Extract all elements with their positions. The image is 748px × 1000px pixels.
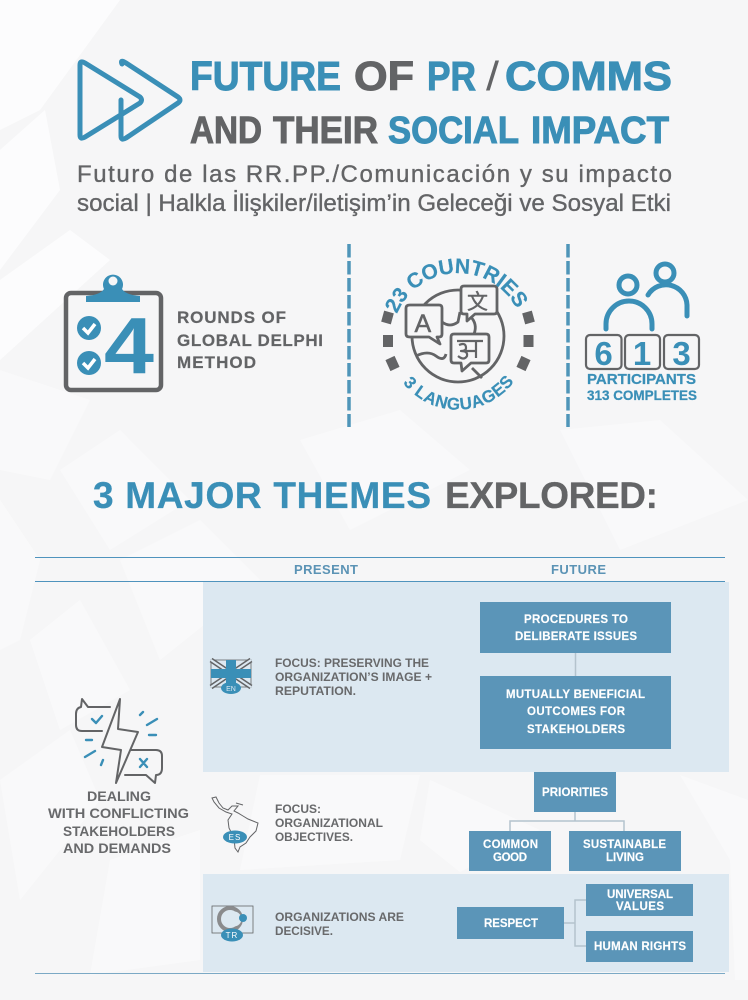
subtitle in Spanish and Turkish: Futuro de las RR.PP./Comunicación y su impacto [77,161,672,188]
icon: Turkey flag with TR badge: TR [226,931,238,940]
text: rounds of global Delphi method [177,308,323,372]
subtitle in Spanish and Turkish: social | Halkla İlişkiler/iletişim’in Geleceği ve Sosyal Etki [77,190,671,217]
box: human rights: HUMAN RIGHTS [594,941,686,953]
curved label: 23 countries: 23 COUNTRIES [386,258,528,314]
title: THEIR [273,110,378,152]
box: common good [469,831,551,871]
heading: 3 major themes explored: EXPLORED: [445,475,658,516]
icon: Turkey flag with TR badge [212,906,253,942]
text: Spanish present focus: FOCUS: [275,802,321,816]
text: Turkish present focus: DECISIVE. [275,924,333,938]
box: universal values [586,884,693,916]
icon: globe with translation bubbles [406,286,504,382]
box: procedures to deliberate issues [480,602,671,653]
panel: English row [203,582,729,772]
icon: clipboard with 4: 4 [104,301,155,390]
icon: Latin America map with ES badge: ES [229,833,241,842]
box: priorities: PRIORITIES [542,787,608,799]
subtitle in Spanish and Turkish [77,161,672,217]
text: dealing with conflicting stakeholders and demands: STAKEHOLDERS [63,823,175,839]
title: / [486,53,500,99]
box: common good: GOOD [493,852,527,864]
counter: 613 [586,335,699,372]
text: English present focus [275,656,432,698]
icon: clipboard with 4 [66,275,161,390]
text: Spanish present focus: OBJECTIVES. [275,830,353,844]
text: dealing with conflicting stakeholders and demands [48,788,189,856]
text: English present focus: REPUTATION. [275,684,356,698]
box: procedures to deliberate issues: PROCEDURES TO [524,614,628,626]
text: Turkish present focus [275,910,404,938]
text: dealing with conflicting stakeholders and demands: DEALING [87,788,151,804]
title: IMPACT [531,110,669,152]
box: mutually beneficial outcomes: OUTCOMES FOR [527,706,626,718]
title: SOCIAL [388,110,519,152]
box: priorities [534,772,616,812]
text: Spanish present focus: ORGANIZATIONAL [275,816,383,830]
box: sustainable living: SUSTAINABLE [583,839,666,851]
curved label: 3 languages: 3 LANGUAGES [404,376,512,410]
column header: future: FUTURE [551,562,606,577]
box: human rights [586,931,693,962]
panel: Turkish row [203,874,729,972]
icon: globe with translation bubbles: 文 [467,286,488,316]
text: dealing with conflicting stakeholders and demands: WITH CONFLICTING [48,805,189,821]
title: COMMS [505,53,672,99]
column header: present: PRESENT [294,562,358,577]
box: mutually beneficial outcomes [480,676,671,749]
title: FUTURE [190,53,341,99]
text: rounds of global Delphi method: METHOD [177,353,256,372]
icon: UK flag with EN badge [211,660,251,694]
box: mutually beneficial outcomes: STAKEHOLDERS [527,724,625,736]
text: participants and completes: PARTICIPANTS [587,371,696,388]
text: participants and completes: 313 COMPLETES [587,387,697,403]
counter: 613: 3 [672,335,691,372]
ring of gray dashes [386,312,530,369]
text: Spanish present focus [275,802,383,844]
icon: Latin America map with ES badge [212,797,258,852]
box: sustainable living [569,831,681,871]
box: mutually beneficial outcomes: MUTUALLY BENEFICIAL [506,689,645,701]
icon: globe with translation bubbles: A [414,310,432,338]
title [190,53,672,152]
box: procedures to deliberate issues: DELIBERATE ISSUES [515,631,637,643]
box: respect [457,907,564,939]
text: English present focus: FOCUS: PRESERVING THE [275,656,429,670]
heading: 3 major themes explored: 3 MAJOR THEMES [93,475,431,516]
counter: 613: 6 [594,335,613,372]
box: common good: COMMON [483,839,538,851]
title: OF [354,53,414,99]
title: PR [427,53,476,99]
text: dealing with conflicting stakeholders and demands: AND DEMANDS [63,840,171,856]
icon: two people [606,264,687,329]
title: AND [190,110,262,152]
icon: conflicting speech bubbles with lightning [76,699,162,783]
box: universal values: VALUES [616,901,664,913]
icon: UK flag with EN badge: EN [226,686,236,693]
logo: double play arrows [80,61,180,139]
panel: Spanish row [212,772,681,871]
text: Turkish present focus: ORGANIZATIONS ARE [275,910,404,924]
box: universal values: UNIVERSAL [607,889,673,901]
box: sustainable living: LIVING [606,852,644,864]
text: rounds of global Delphi method: GLOBAL DELPHI [177,331,323,350]
heading: 3 major themes explored [93,475,658,516]
box: respect: RESPECT [484,918,538,930]
text: English present focus: ORGANIZATION’S IMAGE + [275,670,432,684]
text: rounds of global Delphi method: ROUNDS OF [177,308,286,327]
text: participants and completes [587,371,697,403]
counter: 613: 1 [633,335,651,372]
